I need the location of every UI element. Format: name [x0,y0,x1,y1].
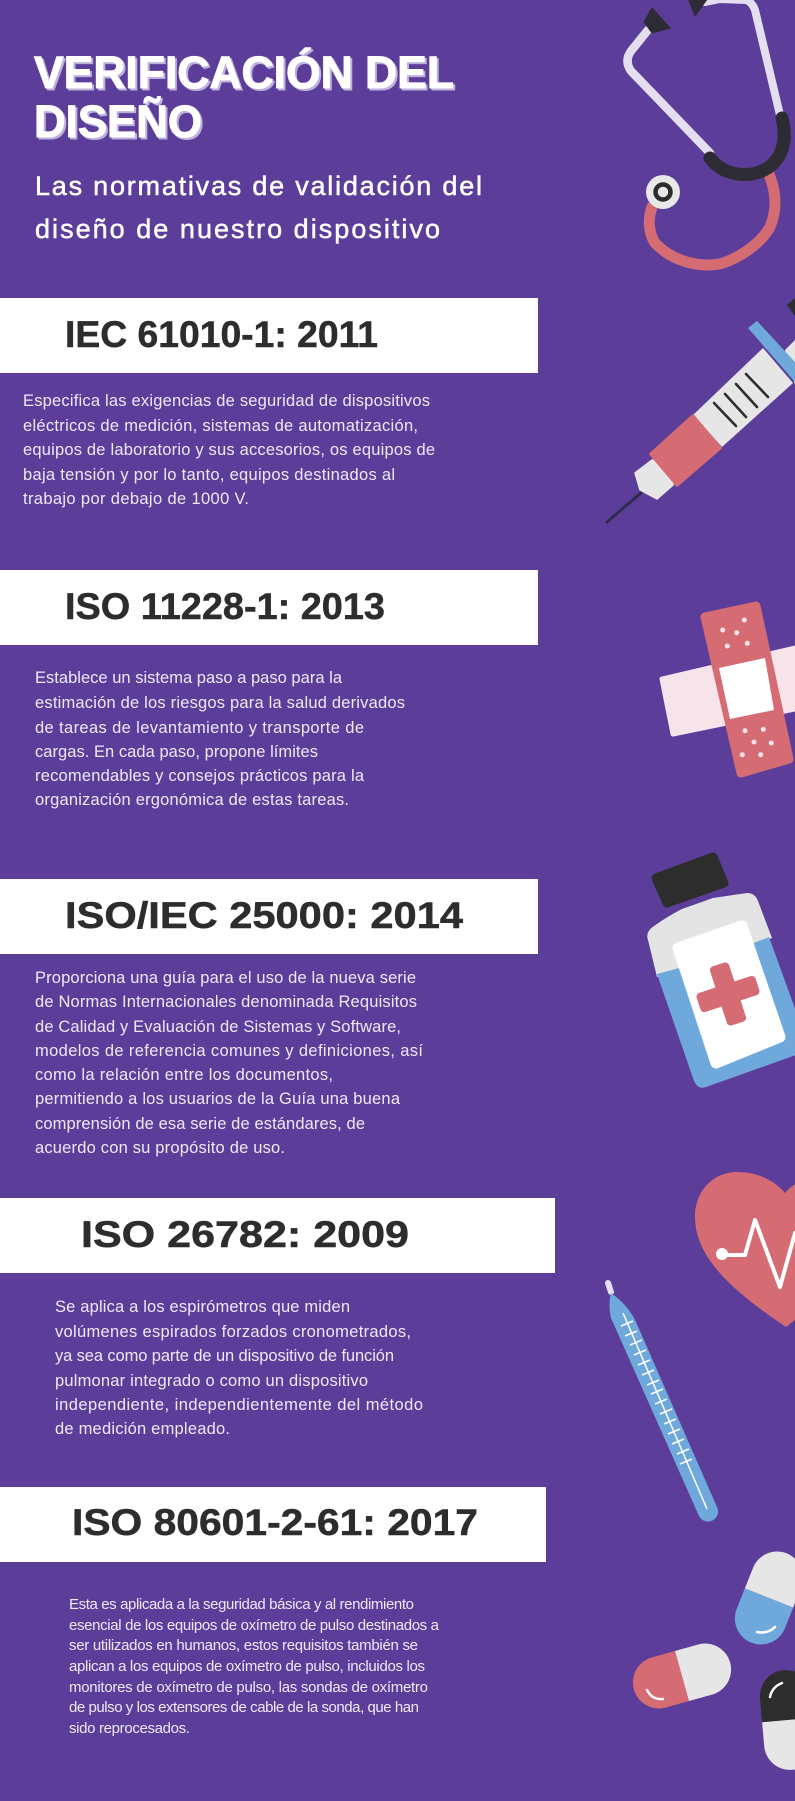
panel: ISO 26782: pulmonar integrado o como un dispositivo [55,1372,368,1390]
panel: ISO 80601-2-61: aplican a los equipos de oxímetro de pulso, incluidos los [69,1658,425,1675]
panel: ISO 80601-2-61: ser utilizados en humanos, estos requisitos también se [69,1637,418,1654]
panel: ISO 26782: ISO 26782: 2009 [81,1214,409,1255]
panel: ISO/IEC 25000: acuerdo con su propósito de uso. [35,1139,285,1157]
icon: bandage [662,606,795,773]
panel: ISO 11228-1: estimación de los riesgos para la salud derivados [35,694,405,712]
panel: IEC 61010-1: trabajo por debajo de 1000 V. [23,490,249,508]
panel: ISO 11228-1 [0,570,538,809]
panel: ISO 26782: volúmenes espirados forzados cronometrados, [55,1323,411,1341]
panel: ISO/IEC 25000: permitiendo a los usuarios de la Guía una buena [35,1090,401,1108]
icon: heart with pulse [695,1172,795,1327]
panel: ISO/IEC 25000: de Calidad y Evaluación de Sistemas y Software, [35,1018,401,1036]
subtitle: Las normativas de validación del [35,171,482,201]
panel: IEC 61010-1: baja tensión y por lo tanto, equipos destinados al [23,466,395,484]
panel: ISO/IEC 25000: como la relación entre los documentos, [35,1066,333,1084]
panel: ISO 11228-1: de tareas de levantamiento y transporte de [35,719,364,737]
panel: ISO/IEC 25000: de Normas Internacionales denominada Requisitos [35,993,417,1011]
panel: ISO/IEC 25000: comprensión de esa serie de estándares, de [35,1115,365,1133]
panel: IEC 61010-1: equipos de laboratorio y sus accesorios, os equipos de [23,441,435,459]
panel: ISO 26782 [0,1198,555,1438]
panel: ISO 80601-2-61: esencial de los equipos de oxímetro de pulso destinados a [69,1617,440,1634]
panel: ISO 80601-2-61: monitores de oxímetro de pulso, las sondas de oxímetro [69,1679,428,1696]
panel: ISO 26782: de medición empleado. [55,1420,230,1438]
icon: red capsule [627,1638,737,1714]
icon: blue capsule [727,1544,795,1652]
panel: ISO 11228-1: organización ergonómica de estas tareas. [35,791,349,809]
panel: ISO 11228-1: ISO 11228-1: 2013 [65,586,385,627]
icon: syringe [607,298,795,522]
panel: ISO/IEC 25000: ISO/IEC 25000: 2014 [65,895,463,936]
icon: thermometer [608,1283,718,1522]
panel: ISO 80601-2-61: sido reprocesados. [69,1720,190,1737]
panel: ISO 26782: Se aplica a los espirómetros que miden [55,1298,350,1316]
panel: ISO/IEC 25000 [0,879,538,1157]
panel: ISO 80601-2-61: de pulso y los extensores de cable de la sonda, que han [69,1699,419,1716]
icon: medicine bottle [647,857,795,1088]
title: DISEÑO [34,96,202,147]
panel: ISO 80601-2-61 [0,1487,546,1737]
subtitle: diseño de nuestro dispositivo [35,214,440,244]
panel: IEC 61010-1: Especifica las exigencias de seguridad de dispositivos [23,392,430,410]
subtitle [35,171,482,244]
panel: ISO/IEC 25000: modelos de referencia comunes y definiciones, así [35,1042,423,1060]
icon: black capsule [758,1668,795,1772]
panel: ISO 80601-2-61: ISO 80601-2-61: 2017 [72,1502,478,1543]
panel: ISO 11228-1: recomendables y consejos prácticos para la [35,767,365,785]
title [34,47,454,147]
panel: IEC 61010-1 [0,298,538,508]
title: VERIFICACIÓN DEL [34,47,454,98]
panel: ISO 80601-2-61: Esta es aplicada a la seguridad básica y al rendimiento [69,1596,414,1613]
panel: ISO 26782: independiente, independientemente del método [55,1396,423,1414]
icon: stethoscope [628,0,784,265]
panel: ISO 26782: ya sea como parte de un dispositivo de función [55,1347,394,1365]
panel: IEC 61010-1: IEC 61010-1: 2011 [65,314,378,355]
panel: ISO/IEC 25000: Proporciona una guía para el uso de la nueva serie [35,969,416,987]
panel: ISO 11228-1: Establece un sistema paso a paso para la [35,669,343,687]
panel: IEC 61010-1: eléctricos de medición, sistemas de automatización, [23,417,418,435]
panel: ISO 11228-1: cargas. En cada paso, propone límites [35,743,318,761]
